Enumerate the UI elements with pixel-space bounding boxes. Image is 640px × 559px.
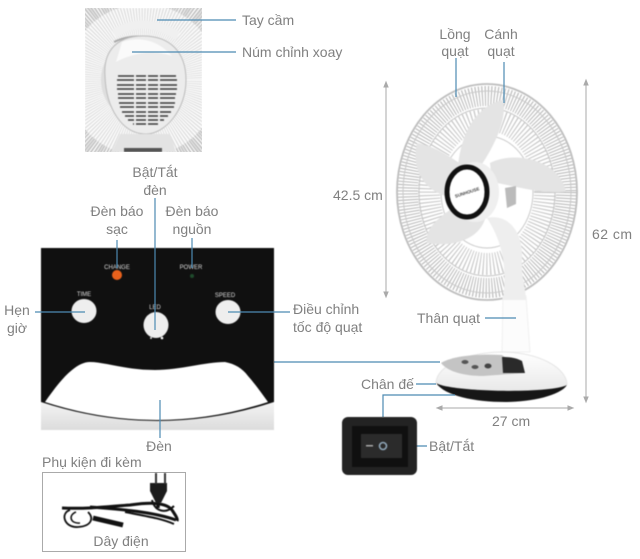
dimension: height of grille [384, 82, 388, 297]
lamp window [45, 362, 268, 420]
fan hub: SUNHOUSE [454, 186, 480, 199]
control panel photo: TIME [77, 292, 91, 298]
label: Lồng quạt: Lồng [439, 26, 471, 42]
rear view photo of fan [85, 8, 202, 152]
panel printed labels: CHANGE [104, 265, 130, 271]
label lines: rear view [132, 20, 236, 52]
accessories box [42, 472, 186, 552]
label: Điều chỉnh tốc độ quạt: Điều chỉnh [293, 301, 359, 317]
label: Hẹn giờ: Hẹn [4, 302, 30, 318]
label: Bật/Tắt đèn: Bật/Tắt [132, 164, 178, 180]
power LED [190, 274, 194, 278]
label: Đèn báo nguồn: nguồn [173, 221, 211, 237]
dimension: total height [584, 80, 588, 402]
charge LED [112, 270, 122, 280]
knob: time [72, 299, 96, 323]
label: Đèn báo nguồn: Đèn báo [166, 203, 218, 219]
label: Dây điện: Dây điện [93, 533, 149, 549]
label: Điều chỉnh tốc độ quạt: tốc độ quạt [293, 319, 362, 335]
label lines: control panel [35, 198, 290, 438]
label: Tay cầm: Tay cầm [242, 12, 294, 28]
control panel photo: SPEED [215, 293, 236, 299]
label: Núm chỉnh xoay: Núm chỉnh xoay [242, 44, 342, 60]
label: Chân đế: Chân đế [361, 376, 414, 392]
label: Đèn: Đèn [146, 438, 172, 454]
fan [397, 84, 577, 402]
fan grille [397, 84, 577, 300]
lamp band [41, 402, 274, 430]
control panel photo [41, 248, 274, 430]
label: Phụ kiện đi kèm: Phụ kiện đi kèm [42, 454, 142, 470]
label: Bật/Tắt: Bật/Tắt [429, 438, 474, 454]
fan neck [487, 217, 526, 300]
label: Đèn báo sạc: Đèn báo [91, 203, 143, 219]
label lines: fan parts [274, 58, 516, 446]
power cord [62, 495, 177, 527]
label: 62 cm: 62 cm [592, 226, 632, 242]
fan base [436, 352, 567, 402]
power switch photo [342, 417, 417, 475]
label: 27 cm: 27 cm [492, 413, 530, 429]
label: 42.5 cm: 42.5 cm [333, 187, 383, 203]
motor housing detail [505, 186, 516, 208]
label: Thân quạt: Thân quạt [417, 310, 480, 326]
plug [150, 473, 167, 503]
label: Đèn báo sạc: sạc [106, 221, 128, 237]
fan stem [502, 296, 530, 352]
fan blades [416, 100, 566, 244]
label: Cánh quạt: quạt [487, 43, 515, 59]
label: Lồng quạt: quạt [441, 43, 469, 59]
knob: LED [144, 312, 168, 338]
control panel photo: LED [149, 305, 162, 311]
knob: speed [216, 300, 240, 324]
label: Cánh quạt: Cánh [484, 26, 518, 42]
control panel photo: POWER [180, 265, 203, 271]
dimension: base width [437, 406, 573, 410]
label: Hẹn giờ: giờ [7, 320, 27, 336]
fan hub [447, 162, 499, 222]
label: Bật/Tắt đèn: đèn [143, 182, 167, 198]
